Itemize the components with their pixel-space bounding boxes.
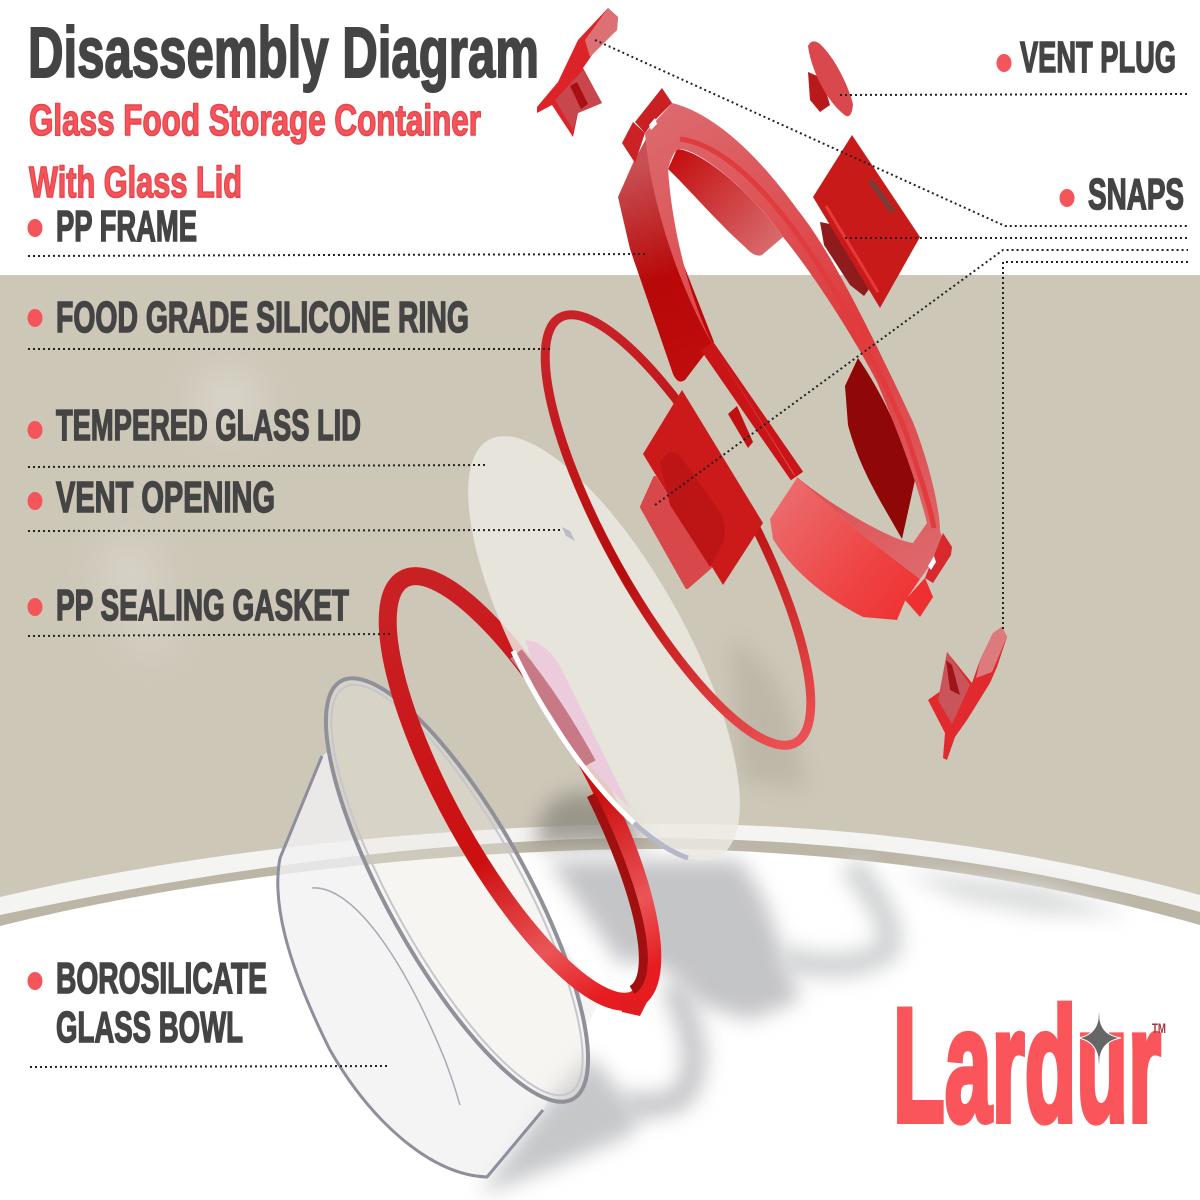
- title: Disassembly Diagram: [28, 14, 539, 93]
- vent opening: [562, 527, 575, 541]
- subtitle line 2: With Glass Lid: [29, 158, 242, 207]
- clip silhouette: [537, 8, 618, 137]
- lid white edge: [513, 651, 634, 823]
- snap plate: [813, 135, 920, 308]
- part: upper clip snap: [537, 8, 618, 137]
- label: PP frame: PP FRAME: [56, 202, 197, 251]
- background: curved white band: [0, 824, 1200, 915]
- frame inner wall right: [845, 358, 915, 539]
- snap groove: [870, 180, 893, 212]
- label: borosilicate glass bowl: GLASS BOWL: [56, 1003, 243, 1052]
- part: food grade silicone ring: [499, 284, 857, 776]
- floor edge shade right: [900, 870, 1130, 915]
- ring shadow lower: [625, 985, 694, 1105]
- clip silhouette: [928, 627, 1007, 760]
- frame upper lug block: [622, 122, 645, 163]
- bowl rim: [280, 647, 634, 1133]
- frame lower strip: [707, 346, 797, 476]
- background: beige wall: [0, 275, 1200, 935]
- ring shadow right: [783, 864, 890, 965]
- label: tempered glass lid: TEMPERED GLASS LID: [56, 401, 361, 450]
- frame upper lug hole: [649, 118, 657, 130]
- clip arm: [585, 8, 618, 57]
- label: borosilicate glass bowl: [28, 954, 267, 1052]
- snap plate: [643, 390, 763, 585]
- snap recess: [660, 452, 725, 567]
- label: PP frame: [28, 202, 197, 251]
- shadow on wall under lid: [536, 792, 645, 845]
- label: PP sealing gasket: PP SEALING GASKET: [56, 581, 349, 630]
- snap tab behind: [820, 222, 872, 296]
- part: upper snap: [813, 135, 920, 308]
- clip slot: [570, 82, 588, 109]
- part: lower snap: [642, 390, 763, 587]
- soft glows on the wall: [104, 370, 258, 650]
- label: tempered glass lid: [28, 401, 361, 450]
- big floor shadow: [548, 860, 800, 1020]
- snap ridge: [826, 206, 878, 292]
- bowl reflection: [312, 888, 460, 1105]
- frame lower lug hole: [928, 556, 936, 570]
- frame top face: [645, 103, 945, 579]
- clip arm: [976, 627, 1007, 678]
- logo: Lardur: [893, 975, 1166, 1156]
- logo trademark: TM: [1152, 1020, 1166, 1036]
- frame outer wall left: [618, 137, 714, 382]
- lid pink reflection: [525, 640, 630, 808]
- lid disc: [417, 400, 791, 896]
- background: darker beige strip: [0, 828, 1200, 940]
- plug cap: [808, 41, 853, 116]
- gasket seen through lid: [516, 654, 589, 764]
- part: PP frame: [618, 88, 952, 620]
- gasket nub: [620, 1000, 648, 1016]
- part: PP sealing gasket: [341, 544, 699, 1034]
- subtitle line 1: Glass Food Storage Container: [29, 96, 481, 145]
- part: tempered glass lid: [417, 400, 791, 896]
- part: borosilicate glass bowl: [276, 676, 598, 1178]
- frame lower lug slot: [925, 533, 952, 583]
- label: PP sealing gasket: [28, 581, 349, 630]
- lid silver edge: [634, 823, 688, 858]
- clip panel: [555, 70, 602, 130]
- frame lower lug block: [905, 578, 933, 617]
- snap pull tab: [642, 478, 710, 587]
- bowl body: [280, 752, 598, 1174]
- label: vent opening: VENT OPENING: [56, 473, 275, 522]
- gasket band: [341, 544, 699, 1034]
- label: food grade silicone ring: [28, 293, 469, 342]
- background: white upper area: [0, 0, 1200, 276]
- label: borosilicate glass bowl: BOROSILICATE: [56, 954, 267, 1003]
- bowl rim highlight: [289, 656, 625, 1124]
- frame inner wall top: [668, 149, 783, 256]
- drop shadows of the parts: [480, 640, 1130, 1195]
- logo star icon: [1078, 1003, 1121, 1074]
- part: lower clip snap: [928, 627, 1007, 760]
- shadow of ring on wall: [730, 640, 805, 790]
- part: vent plug: [808, 41, 853, 116]
- clip slot: [946, 660, 960, 695]
- label: vent opening: [28, 473, 275, 522]
- bowl shadow: [480, 1055, 640, 1195]
- clip panel: [938, 652, 970, 724]
- label: snaps: [1060, 170, 1184, 219]
- gasket inner wall: [591, 795, 643, 990]
- frame upper lug slot: [635, 88, 672, 133]
- label: food grade silicone ring: FOOD GRADE SILICONE RING: [56, 293, 469, 342]
- frame outer wall lower: [770, 478, 920, 620]
- frame strip tab: [728, 406, 753, 448]
- bowl outline: [278, 756, 543, 1177]
- plug stem: [808, 72, 830, 112]
- background: white floor: [0, 849, 1200, 1200]
- frame groove: [680, 139, 934, 528]
